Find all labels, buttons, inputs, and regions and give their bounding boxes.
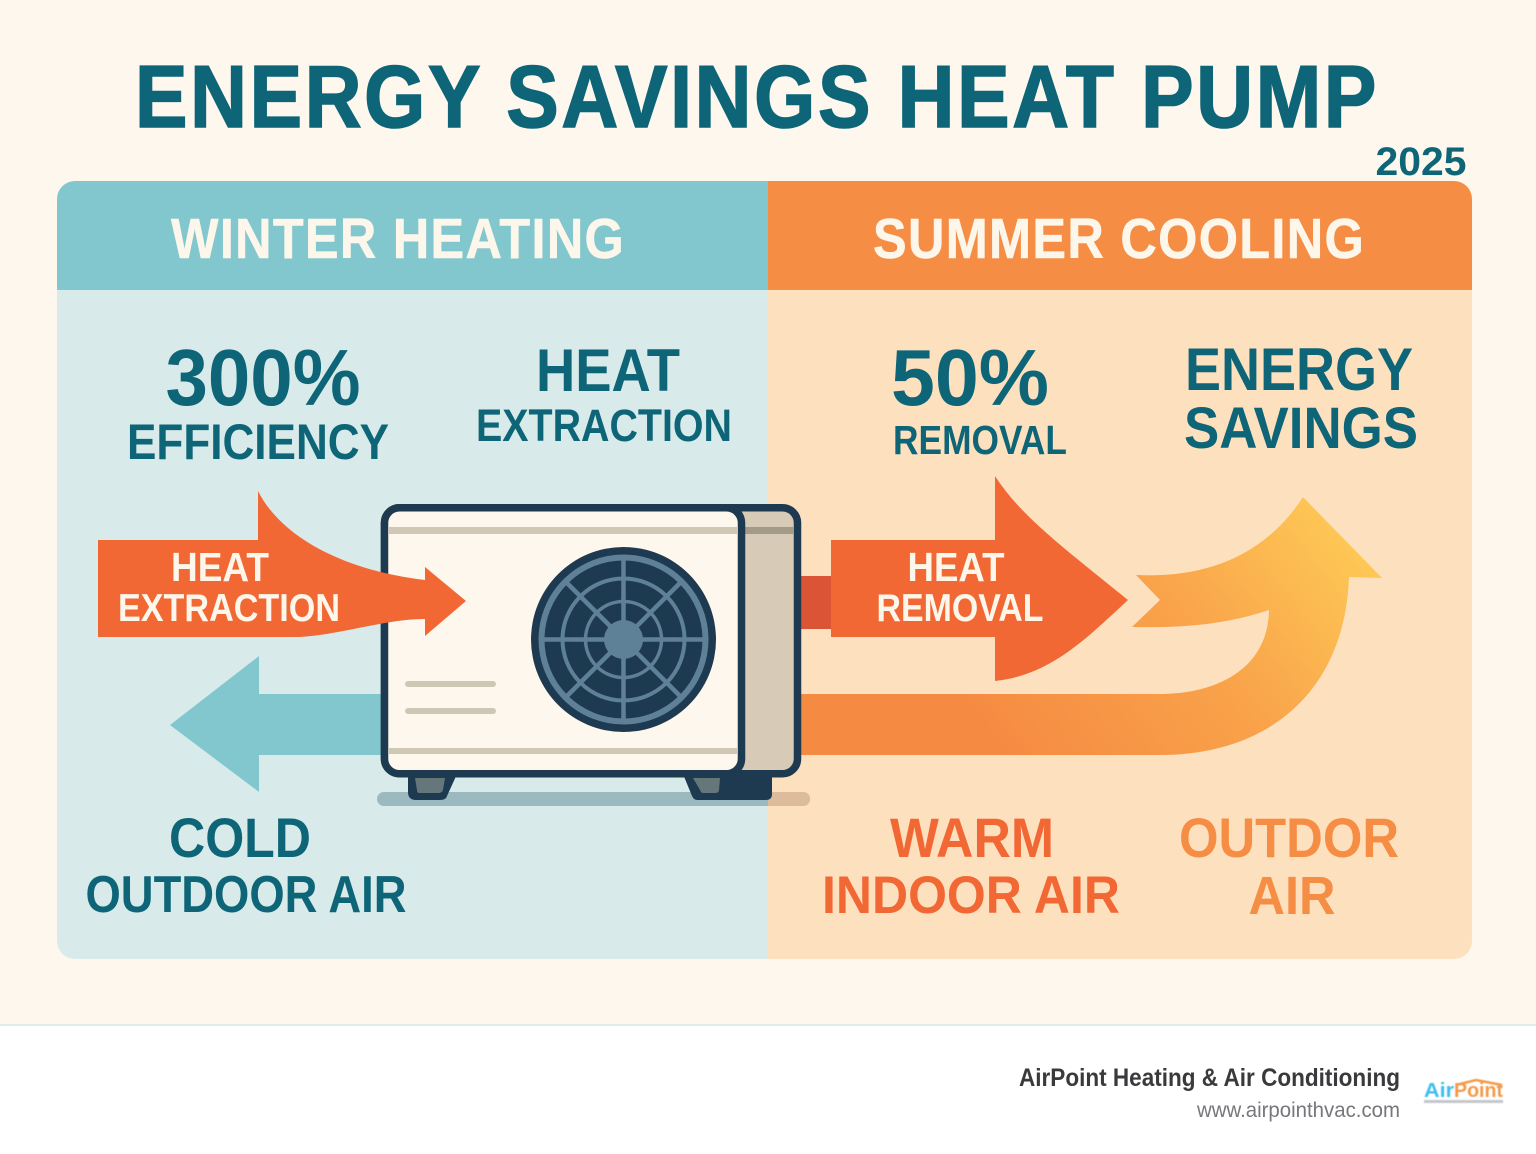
front panel [384, 508, 742, 774]
vent lines [405, 681, 496, 687]
logo [1424, 1080, 1503, 1103]
footer website: www.airpointhvac.com [1196, 1099, 1400, 1122]
label: heat extraction: EXTRACTION [476, 400, 732, 451]
heading: winter heating: WINTER HEATING [171, 207, 625, 271]
label: outdoor air: OUTDOR [1179, 806, 1399, 869]
label: energy savings: ENERGY [1185, 336, 1413, 403]
icon: fan [531, 547, 716, 732]
stat: 300% efficiency [127, 333, 389, 470]
foot inserts [415, 778, 445, 793]
label: cold outdoor air [86, 806, 406, 924]
label: warm indoor air: WARM [890, 806, 1054, 869]
stat: 300% efficiency: EFFICIENCY [127, 414, 389, 470]
heading: summer cooling: SUMMER COOLING [873, 207, 1365, 271]
header: winter band [57, 181, 768, 290]
trim bars [389, 527, 738, 534]
panel: summer background [768, 290, 1472, 959]
label: heat extraction: HEAT [536, 337, 680, 404]
title: ENERGY SAVINGS HEAT PUMP [135, 47, 1379, 146]
arrow: heat extraction [98, 491, 466, 637]
arrow: cold air leaving [170, 656, 390, 792]
arrow label: heat extraction: HEAT [171, 544, 269, 590]
label: heat extraction [476, 337, 732, 451]
panel: winter background [57, 290, 768, 959]
label: outdoor air: AIR [1248, 866, 1336, 926]
logo: Air [1424, 1080, 1454, 1102]
unit body [384, 508, 798, 774]
side band [745, 527, 794, 534]
arrow: heat removal: REMOVAL [876, 587, 1044, 630]
unit feet [408, 774, 457, 800]
unit shadow [377, 792, 810, 806]
icon: heat pump unit [384, 508, 798, 800]
stat: 300% efficiency: 300% [166, 333, 360, 422]
arrow: orange outdoor air curve [795, 497, 1382, 755]
label: energy savings [1184, 336, 1418, 461]
label: outdoor air [1179, 806, 1399, 926]
panel: seasons [57, 181, 1472, 959]
unit shadow right [768, 792, 810, 806]
arrow: heat removal [831, 476, 1128, 681]
footer company name: AirPoint Heating & Air Conditioning [1019, 1064, 1400, 1092]
stat: 50% removal: 50% [891, 333, 1049, 422]
label: warm indoor air: INDOOR AIR [822, 866, 1120, 925]
stat: 50% removal: REMOVAL [893, 417, 1067, 463]
arrow connector: heat removal stub [795, 576, 835, 629]
label: cold outdoor air: COLD [169, 806, 311, 869]
year label: 2025 [1376, 140, 1466, 184]
stat: 50% removal [891, 333, 1067, 463]
label: energy savings: SAVINGS [1184, 396, 1418, 461]
footer [0, 1024, 1536, 1154]
logo: Point [1454, 1080, 1503, 1102]
arrow label: heat removal: HEAT [908, 544, 1004, 590]
label: warm indoor air [822, 806, 1120, 925]
arrow: heat extraction: EXTRACTION [118, 587, 340, 630]
label: cold outdoor air: OUTDOOR AIR [86, 866, 406, 924]
header: summer band [768, 181, 1472, 290]
